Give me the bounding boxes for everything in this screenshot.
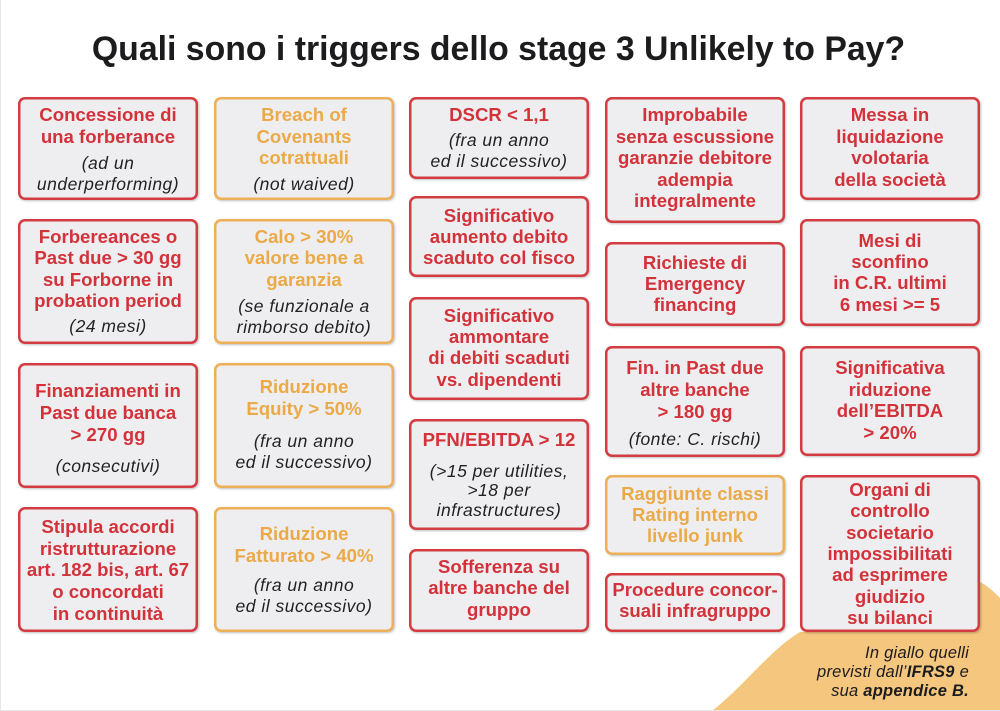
card: Significativo aumento debito: Significativo xyxy=(444,205,554,226)
card: Finanziamenti in Past due banca: > 270 gg xyxy=(71,424,145,445)
card: Forbereances o Past due: su Forborne in xyxy=(43,269,173,290)
card: PFN/EBITDA: infrastructures) xyxy=(437,500,561,520)
card: Significativo ammontare: ammontare xyxy=(449,326,549,347)
card: Improbabile: senza escussione xyxy=(616,126,774,147)
card: Calo valore bene a garanzia: garanzia xyxy=(266,269,342,290)
card: Improbabile: garanzie debitore xyxy=(618,147,772,168)
card: Breach of Covenants: Breach of xyxy=(261,104,347,125)
card: Sofferenza: gruppo xyxy=(467,599,531,620)
card: Improbabile xyxy=(605,97,785,223)
title: Quali sono i triggers dello stage 3 Unlikely to Pay? xyxy=(92,30,905,68)
card: Significativo aumento debito: aumento debito xyxy=(430,226,568,247)
card: Significativa riduzione EBITDA: > 20% xyxy=(863,422,917,443)
card: Fin. in Past due: Fin. in Past due xyxy=(626,357,764,378)
card: Riduzione Fatturato: Riduzione xyxy=(260,523,348,544)
card: Significativo aumento debito: scaduto col fisco xyxy=(423,247,575,268)
card: Stipula accordi ristrutturazione: Stipula accordi xyxy=(41,516,175,537)
card: Organi di controllo: giudizio xyxy=(855,586,925,607)
card: Significativa riduzione EBITDA: Significativa xyxy=(835,357,945,378)
card: Mesi di sconfino: Mesi di xyxy=(858,230,922,251)
card: Concessione di una forberance: Concessione di xyxy=(39,104,177,125)
card: PFN/EBITDA xyxy=(409,419,589,530)
card: Messa in liquidazione: liquidazione xyxy=(836,126,944,147)
card: Organi di controllo: su bilanci xyxy=(847,607,933,628)
card: Breach of Covenants: cotrattuali xyxy=(259,147,349,168)
card: Stipula accordi ristrutturazione: art. 182 bis, art. 67 xyxy=(27,559,189,580)
card: PFN/EBITDA: (>15 per utilities, xyxy=(430,461,568,481)
card: Organi di controllo: controllo xyxy=(850,500,930,521)
card: Stipula accordi ristrutturazione: o concordati xyxy=(52,581,164,602)
card: DSCR xyxy=(409,97,589,179)
card: Concessione di una forberance xyxy=(18,97,198,200)
card: Riduzione Fatturato xyxy=(214,507,394,632)
card: Riduzione Equity: (fra un anno xyxy=(254,431,354,451)
card: Significativo ammontare: vs. dipendenti xyxy=(436,369,562,390)
card: Raggiunte classi xyxy=(605,475,785,555)
card: Organi di controllo: ad esprimere xyxy=(832,564,948,585)
card: Richieste di Emergency financing xyxy=(605,242,785,326)
card: Stipula accordi ristrutturazione xyxy=(18,507,198,632)
card: Concessione di una forberance: underperforming) xyxy=(37,174,179,194)
card: Sofferenza: altre banche del xyxy=(428,577,570,598)
card: Riduzione Fatturato: (fra un anno xyxy=(254,575,354,595)
card: Procedure concorsuali: suali infragruppo xyxy=(619,600,771,621)
card: Forbereances o Past due: Forbereances o xyxy=(39,226,177,247)
card: Organi di controllo: societario xyxy=(846,522,934,543)
card: Concessione di una forberance: (ad un xyxy=(82,153,134,173)
card: Finanziamenti in Past due banca xyxy=(18,363,198,488)
card: Fin. in Past due: altre banche xyxy=(640,379,750,400)
card: Calo valore bene a garanzia: Calo > 30% xyxy=(255,226,353,247)
card: Calo valore bene a garanzia xyxy=(214,219,394,344)
card: Organi di controllo xyxy=(800,475,980,632)
card: Riduzione Equity: Equity > 50% xyxy=(246,398,362,419)
card: Raggiunte classi: Rating interno xyxy=(632,504,758,525)
footnote xyxy=(816,644,970,700)
card: Sofferenza xyxy=(409,549,589,632)
card: DSCR: (fra un anno xyxy=(449,130,549,150)
card: Breach of Covenants: (not waived) xyxy=(253,174,355,194)
card: Organi di controllo: Organi di xyxy=(849,479,931,500)
card: Finanziamenti in Past due banca: (consecutivi) xyxy=(56,456,160,476)
card: Forbereances o Past due xyxy=(18,219,198,344)
card: Significativa riduzione EBITDA: dell’EBITDA xyxy=(837,400,943,421)
card: Finanziamenti in Past due banca: Finanziamenti in xyxy=(35,380,181,401)
card: PFN/EBITDA: PFN/EBITDA > 12 xyxy=(423,429,575,450)
card: Riduzione Equity: ed il successivo) xyxy=(236,452,372,472)
card: Significativo ammontare: Significativo xyxy=(444,305,554,326)
card: Richieste di Emergency financing: Richieste di xyxy=(643,252,747,273)
card: DSCR: ed il successivo) xyxy=(431,151,567,171)
card: Raggiunte classi: livello junk xyxy=(647,525,743,546)
card: Mesi di sconfino xyxy=(800,219,980,326)
card: Improbabile: Improbabile xyxy=(642,104,748,125)
footnote: sua appendice B. xyxy=(831,682,969,700)
card: PFN/EBITDA: >18 per xyxy=(467,480,531,500)
card: Sofferenza: Sofferenza su xyxy=(438,556,560,577)
card: Significativo aumento debito xyxy=(409,196,589,277)
card: Messa in liquidazione: della società xyxy=(834,169,946,190)
card: Stipula accordi ristrutturazione: ristrutturazione xyxy=(40,538,176,559)
card: Forbereances o Past due: Past due > 30 gg xyxy=(34,247,182,268)
card: Significativo ammontare xyxy=(409,297,589,400)
card: Forbereances o Past due: (24 mesi) xyxy=(69,316,147,336)
card: Raggiunte classi: Raggiunte classi xyxy=(621,483,769,504)
card: Mesi di sconfino: in C.R. ultimi xyxy=(833,272,947,293)
card: Fin. in Past due: > 180 gg xyxy=(658,401,732,422)
card: Richieste di Emergency financing: financing xyxy=(654,294,736,315)
card: Significativa riduzione EBITDA: riduzione xyxy=(849,379,931,400)
card: Calo valore bene a garanzia: valore bene a xyxy=(245,247,363,268)
card: DSCR: DSCR < 1,1 xyxy=(449,104,549,125)
card: Riduzione Fatturato: ed il successivo) xyxy=(236,596,372,616)
card: Significativo ammontare: di debiti scaduti xyxy=(428,347,570,368)
footnote: In giallo quelli xyxy=(865,644,969,662)
card: Mesi di sconfino: sconfino xyxy=(851,251,929,272)
card: Finanziamenti in Past due banca: Past due banca xyxy=(40,402,176,423)
card: Mesi di sconfino: 6 mesi >= 5 xyxy=(840,294,940,315)
card: Messa in liquidazione: Messa in xyxy=(851,104,929,125)
card: Forbereances o Past due: probation period xyxy=(34,290,182,311)
card: Richieste di Emergency financing: Emergency xyxy=(645,273,745,294)
card: Riduzione Equity xyxy=(214,363,394,488)
card: Stipula accordi ristrutturazione: in continuità xyxy=(53,603,163,624)
card: Concessione di una forberance: una forberance xyxy=(41,126,175,147)
card: Breach of Covenants: Covenants xyxy=(256,126,352,147)
card: Improbabile: adempia xyxy=(657,169,733,190)
footnote: previsti dall’IFRS9 e xyxy=(817,663,969,681)
card: Fin. in Past due: (fonte: C. rischi) xyxy=(629,429,761,449)
card: Messa in liquidazione: volotaria xyxy=(851,147,929,168)
card: Organi di controllo: impossibilitati xyxy=(827,543,952,564)
card: Procedure concorsuali: Procedure concor- xyxy=(612,579,778,600)
card: Riduzione Fatturato: Fatturato > 40% xyxy=(234,545,373,566)
card: Calo valore bene a garanzia: (se funzionale a xyxy=(238,296,370,316)
card: Improbabile: integralmente xyxy=(634,190,756,211)
card: Fin. in Past due xyxy=(605,346,785,457)
card: Procedure concorsuali xyxy=(605,573,785,632)
card: Riduzione Equity: Riduzione xyxy=(260,376,348,397)
card: Breach of Covenants xyxy=(214,97,394,200)
card: Significativa riduzione EBITDA xyxy=(800,346,980,456)
card: Calo valore bene a garanzia: rimborso debito) xyxy=(237,317,371,337)
card: Messa in liquidazione xyxy=(800,97,980,200)
